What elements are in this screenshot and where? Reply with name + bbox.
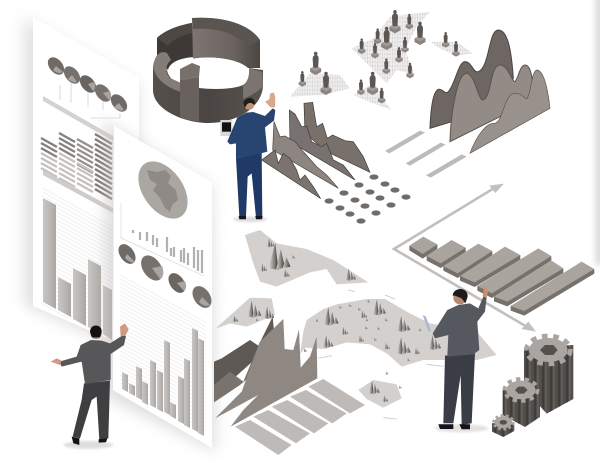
jagged peak charts (262, 102, 370, 199)
continents map with spikes (214, 230, 497, 455)
panel: back report sheet (24, 17, 139, 358)
dotted continents (290, 12, 473, 110)
bars (409, 244, 594, 316)
pie chart row (43, 54, 130, 141)
spike clusters (233, 238, 441, 402)
dot matrix (324, 174, 410, 224)
businessman in grey suit pointing (423, 286, 488, 432)
small bar chart (121, 203, 204, 276)
stripes under mountains (385, 131, 467, 178)
peak area chart (214, 317, 317, 427)
businessman with raised arms (51, 323, 129, 449)
donut chart (153, 18, 263, 123)
axis arrows (394, 184, 536, 332)
pie chart row (115, 241, 215, 311)
right edge shading (595, 0, 600, 265)
isometric bar chart with arrows (394, 184, 594, 332)
globe (128, 152, 198, 228)
businessman in blue suit (220, 93, 275, 222)
base stripes (235, 379, 365, 455)
mountain area chart (430, 30, 550, 153)
grouped bar chart (120, 274, 206, 436)
panel: front report sheet (104, 120, 216, 452)
continents (215, 230, 497, 408)
laptop (220, 120, 232, 136)
figures on pedestals (299, 10, 460, 103)
striped bar table (41, 133, 113, 213)
tall bar chart (42, 186, 113, 340)
people world map (290, 10, 550, 178)
gears (492, 336, 573, 437)
